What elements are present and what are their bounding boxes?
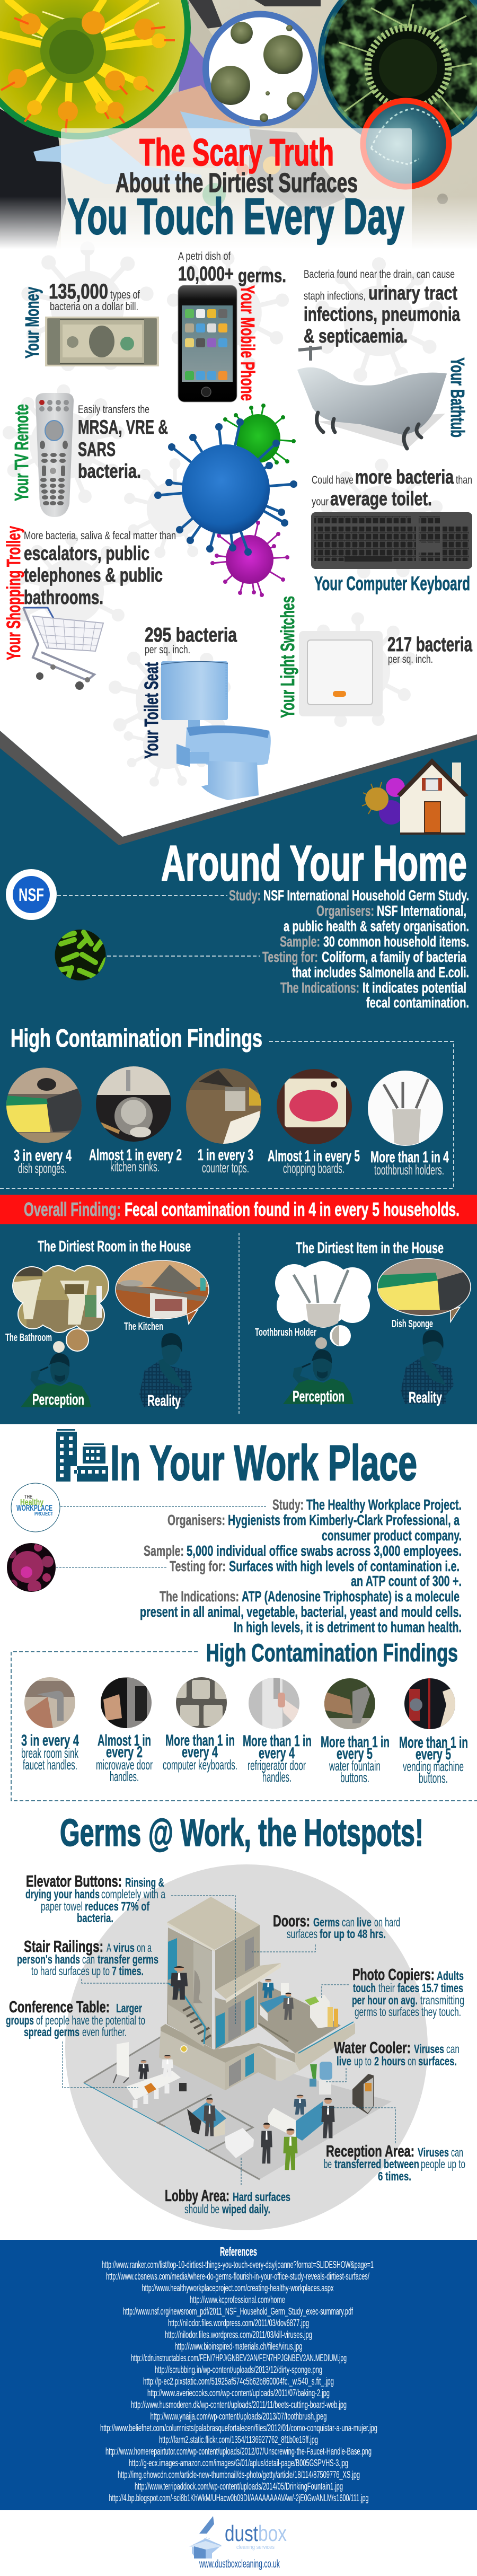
small office desk — [192, 2101, 226, 2129]
hero circle: yellow virus — [0, 0, 188, 136]
home finding labels: chopping boards. — [283, 1160, 344, 1176]
panel: your shopping trolley: More bacteria, saliva & fecal matter than — [24, 530, 176, 542]
callout: conference table: spread germs — [24, 2025, 80, 2039]
panel: your toilet seat: 295 bacteria — [145, 624, 237, 646]
mid wall and doors — [215, 1982, 257, 2051]
icon: toilet — [161, 661, 271, 800]
home finding labels: dish sponges. — [18, 1160, 67, 1176]
panel: your tv remote — [11, 393, 168, 517]
panel: your bathtub: Your Bathtub — [447, 357, 469, 437]
vending machine — [352, 2074, 374, 2114]
callout: water cooler: surfaces. — [418, 2054, 457, 2068]
callout: elevator buttons: Elevator Buttons: — [26, 1872, 122, 1890]
illustration: isometric office building — [84, 1897, 392, 2179]
panel: references: http://www.healthyworkplaceproject.com/creating-healthy-workplaces.aspx — [142, 2283, 334, 2293]
callout: elevator buttons: bacteria. — [77, 1911, 113, 1925]
photo copier — [310, 1995, 330, 2028]
office floor — [258, 1981, 341, 2053]
banner: overall finding — [0, 1195, 477, 1224]
panel: references: http://p-ec2.pixstatic.com/51925af574c5b62b860004fc._w.540_s.fit_.jpg — [143, 2376, 334, 2387]
panel: your bathtub — [297, 268, 469, 449]
icon: keyboard — [311, 512, 472, 569]
callout: elevator buttons: Rinsing & — [125, 1876, 164, 1889]
grey hotspot circle — [65, 1864, 428, 2230]
work finding labels: buttons. — [419, 1770, 448, 1786]
callout: water cooler: up to — [354, 2054, 372, 2068]
panel: the dirtiest room: Reality — [147, 1392, 181, 1409]
work finding labels: refrigerator door — [248, 1757, 306, 1773]
photo: counter top — [186, 1068, 261, 1145]
panel: your money: bacteria on a dollar bill. — [50, 301, 138, 313]
callout: stair railings — [17, 1937, 158, 1978]
title: About the Dirtiest Surfaces — [116, 168, 358, 198]
panel: your mobile phone: 10,000+ — [178, 263, 234, 285]
callout: doors: for up to 48 hrs. — [320, 1927, 386, 1941]
work finding labels: every 4 — [182, 1743, 218, 1761]
panel: your shopping trolley: telephones & public — [24, 564, 163, 586]
panel: the dirtiest item: Dish Sponge — [392, 1318, 433, 1330]
panel: your tv remote: SARS — [78, 439, 116, 460]
panel: your money: Your Money — [21, 287, 43, 358]
hero circle: teal virus — [363, 101, 449, 187]
callout: stair railings: 7 times. — [112, 1964, 144, 1978]
figure: reality person — [401, 1330, 454, 1404]
callout: stair railings: Stair Railings: — [24, 1937, 103, 1956]
photo: cells — [7, 1543, 56, 1594]
logo: healthy workplace project: Healthy — [20, 1498, 43, 1507]
panel: your toilet seat — [140, 624, 237, 759]
panel: your computer keyboard: your — [312, 496, 329, 508]
callout: doors: Doors: — [273, 1912, 310, 1930]
tower walls — [167, 1927, 212, 2048]
panel: your tv remote: Easily transfers the — [78, 404, 149, 416]
panel: your computer keyboard — [311, 466, 472, 594]
photo: microwave handle — [101, 1677, 152, 1729]
panel: your light switches: Your Light Switches — [277, 596, 298, 718]
photo: faucet handle — [24, 1677, 75, 1729]
callout: reception area: 6 times. — [378, 2169, 411, 2183]
callout: reception area: transferred between — [334, 2157, 419, 2171]
panel: the dirtiest item: Perception — [293, 1388, 344, 1405]
work finding labels: faucet handles. — [23, 1757, 77, 1773]
office desk — [260, 1993, 290, 2012]
panel: your bathtub: & septicaemia. — [304, 325, 408, 347]
callout: conference table: even further. — [82, 2025, 127, 2039]
icon: remote control — [36, 393, 74, 517]
callout: water cooler: 2 hours — [374, 2054, 405, 2068]
text block: workplace study details: Organisers: — [167, 1512, 225, 1528]
panel: your shopping trolley: bathrooms. — [24, 586, 103, 608]
callout: water cooler: Viruses — [414, 2042, 444, 2056]
bubble: kitchen speech — [116, 1260, 209, 1324]
panel: your shopping trolley — [3, 526, 176, 690]
title: The Scary Truth — [139, 132, 334, 174]
work finding labels: every 5 — [416, 1746, 451, 1763]
figure: reality person — [139, 1333, 192, 1407]
panel: the dirtiest item: Toothbrush Holder — [255, 1327, 316, 1338]
heading: high contamination findings (home): High Contamination Findings — [11, 1024, 262, 1052]
callout: photo copiers: touch — [353, 1981, 376, 1995]
logo: NSF — [6, 869, 57, 920]
panel: the dirtiest room: The Bathroom — [5, 1332, 52, 1344]
work finding labels: More than 1 in — [165, 1732, 235, 1749]
bubble: bathroom thought — [11, 1265, 111, 1353]
callout: doors — [273, 1912, 400, 1941]
callout: lobby area: Hard surfaces — [233, 2190, 290, 2204]
panel: references: http://www.husmoderen.dk/wp-content/uploads/2011/11/beets-cutting-board-web.jpg — [131, 2399, 347, 2410]
work finding labels: every 4 — [259, 1745, 295, 1762]
lower block walls — [159, 2031, 225, 2090]
work finding labels: buttons. — [340, 1769, 369, 1785]
callout: reception area: be — [324, 2157, 332, 2171]
text block: workplace study details: Testing for: — [170, 1558, 226, 1574]
panel: your shopping trolley: escalators, public — [24, 542, 149, 564]
callout: water cooler — [334, 2038, 460, 2068]
title — [67, 132, 404, 245]
figure: perception person — [21, 1353, 91, 1407]
icon: house with viruses — [362, 758, 469, 835]
panel: references: http://www.kcprofessional.com/home — [190, 2294, 285, 2305]
work finding labels: computer keyboards. — [163, 1757, 237, 1773]
work finding labels: handles. — [110, 1768, 139, 1784]
callout: water cooler: on — [408, 2054, 416, 2068]
panel: references: http://nilodor.files.wordpress.com/2011/03/kill-viruses.jpg — [165, 2329, 312, 2340]
panel: references: http://www.terripaddock.com/wp-content/uploads/2014/05/DrinkingFountain1.jpg — [135, 2481, 343, 2492]
callout: photo copiers — [352, 1965, 464, 2019]
callout: stair railings: to hard surfaces up to — [31, 1964, 110, 1978]
callout: stair railings: virus — [113, 1941, 135, 1955]
panel: references: http://scrubbing.in/wp-content/uploads/2013/12/dirty-sponge.png — [155, 2364, 322, 2375]
waiting chairs — [225, 2128, 254, 2158]
callout: water cooler: Water Cooler: — [334, 2038, 411, 2057]
callout: conference table: Conference Table: — [9, 1997, 110, 2016]
work finding labels: break room sink — [21, 1745, 79, 1761]
callout: water cooler: can — [446, 2042, 460, 2056]
reception desk — [268, 2108, 297, 2139]
icon: viruses by the house — [362, 778, 405, 825]
ledge — [161, 2024, 295, 2063]
work finding labels: More than 1 in — [321, 1733, 390, 1751]
panel: your mobile phone — [178, 250, 286, 402]
panel: your light switches: per sq. inch. — [388, 653, 433, 665]
logo: healthy workplace project: WORKPLACE — [16, 1504, 52, 1513]
section background: around your home — [0, 711, 477, 1424]
figure: perception person — [283, 1350, 354, 1404]
panel: references: http://farm2.static.flickr.com/1354/1136927762_8f1b0e15ff.jpg — [159, 2434, 318, 2446]
hero circle: white with spiky balls — [206, 14, 315, 123]
callout: doors: on hard — [374, 1915, 400, 1929]
callout: conference table — [6, 1997, 145, 2039]
logo: dustbox: cleaning services — [236, 2544, 275, 2551]
translucent title panel — [61, 128, 412, 250]
text block: household study details: The Indications: — [280, 979, 359, 996]
work finding labels: every 2 — [106, 1743, 143, 1761]
panel: your bathtub: staph infections, — [304, 290, 366, 302]
callout: elevator buttons: drying your hands — [25, 1887, 100, 1901]
panel: references — [0, 2240, 477, 2510]
panel: your mobile phone: Your Mobile Phone — [237, 285, 259, 401]
panel: your computer keyboard: than — [456, 474, 472, 486]
icon: green virus — [225, 406, 294, 463]
icon: blue virus — [158, 422, 294, 552]
callout: lobby area: Lobby Area: — [165, 2186, 229, 2205]
callout: lobby area — [165, 2186, 290, 2216]
conference area — [126, 2071, 181, 2100]
icon: bacteria photo — [55, 930, 106, 980]
callout: photo copiers: their — [378, 1981, 395, 1995]
icon: box with scoop — [189, 2516, 222, 2559]
photo: vending machine — [404, 1678, 457, 1729]
callout: elevator buttons — [25, 1872, 165, 1925]
text block: household study details: Sample: — [280, 933, 320, 950]
panel: references: References — [220, 2245, 257, 2258]
panel: your mobile phone: A petri dish of — [178, 250, 231, 262]
logo: healthy workplace project: PROJECT — [34, 1511, 53, 1517]
panel: references: http://www.ynaija.com/wp-content/uploads/2013/07/toothbrush.jpeg — [151, 2411, 326, 2422]
photo: water fountain — [324, 1678, 375, 1731]
panel: your money: 135,000 — [49, 280, 108, 303]
ground floor plate — [84, 2037, 392, 2179]
panel: references: http://www.bioinspired-materials.ch/files/virus.jpg — [175, 2341, 302, 2352]
panel: the dirtiest room: The Dirtiest Room in the House — [38, 1238, 191, 1255]
water cooler and plant — [310, 2064, 317, 2079]
divider: perception panels — [238, 1233, 240, 1415]
callout: photo copiers: Photo Copiers: — [352, 1965, 435, 1984]
work finding labels: 3 in every 4 — [21, 1732, 79, 1749]
logo: healthy workplace project — [11, 1483, 60, 1532]
panel: your money — [21, 280, 159, 366]
callout: doors: surfaces — [287, 1927, 317, 1941]
home finding labels: counter tops. — [202, 1160, 249, 1176]
photo: dish sponge — [5, 1067, 85, 1144]
panel: references: http://nilodor.files.wordpress.com/2011/03/dov6877.jpg — [168, 2318, 309, 2328]
icon: dollar bill — [45, 317, 159, 366]
bubble: sponge speech — [377, 1258, 471, 1322]
dashed frame: work findings — [11, 1652, 477, 1801]
callout: water cooler: live — [337, 2054, 351, 2068]
panel: your toilet seat: Your Toilet Seat — [140, 662, 162, 759]
callout: lobby area: wiped daily. — [222, 2202, 270, 2216]
logo: dustbox: www.dustboxcleaning.co.uk — [199, 2558, 280, 2570]
icon: bathtub — [297, 346, 447, 449]
text block: workplace study details: Sample: — [144, 1543, 184, 1559]
panel: the dirtiest item — [255, 1240, 471, 1406]
callout: conference table: of people have the potential to — [36, 2013, 145, 2027]
callout: stair railings: person's hands — [17, 1952, 80, 1966]
work finding labels: water fountain — [329, 1758, 381, 1774]
callout: doors: live — [357, 1915, 372, 1929]
callout: reception area — [324, 2142, 465, 2183]
callout: doors: can — [342, 1915, 355, 1929]
hero photo background — [0, 0, 477, 249]
work finding labels: microwave door — [96, 1757, 153, 1773]
dashed frame: home findings — [0, 1041, 454, 1188]
home finding labels — [14, 1146, 449, 1178]
logo: dustbox: dust — [225, 2521, 258, 2546]
icon: magenta virus — [213, 523, 287, 595]
work finding labels: handles. — [262, 1769, 292, 1785]
callout: stair railings: can — [82, 1952, 95, 1966]
callout: elevator buttons: completely with a — [101, 1887, 165, 1901]
text block: workplace study details — [140, 1496, 462, 1635]
panel: your computer keyboard: average toilet. — [330, 488, 432, 510]
home finding labels: Almost 1 in every 2 — [89, 1146, 182, 1164]
text block: household study details: Organisers: — [316, 903, 374, 919]
photo: kitchen sink — [95, 1066, 172, 1142]
panel: the dirtiest room: Perception — [32, 1391, 84, 1408]
text block: household study details: Study: — [229, 887, 261, 904]
panel: references: http://www.averiecooks.com/wp-content/uploads/2011/07/baking-2.jpg — [147, 2388, 330, 2398]
icon: smartphone — [178, 285, 237, 402]
panel: the dirtiest item: Reality — [409, 1389, 442, 1406]
icon: central virus cluster — [158, 406, 294, 595]
connector lines: workplace study — [56, 1507, 266, 1567]
panel: your tv remote: Your TV Remote — [11, 404, 32, 501]
work finding labels: More than 1 in — [243, 1732, 312, 1750]
home finding labels: 1 in every 3 — [198, 1146, 253, 1164]
callout: lobby area: should be — [184, 2202, 219, 2216]
photo: keyboard keys — [176, 1677, 227, 1728]
photo: toothbrush holder — [368, 1071, 443, 1146]
work finding labels: Almost 1 in — [98, 1732, 151, 1749]
callout: photo copiers: per hour on avg. — [352, 1993, 418, 2007]
work finding labels — [21, 1732, 468, 1786]
text block: workplace study details: Study: — [272, 1496, 304, 1513]
icon: shopping trolley — [23, 608, 103, 690]
logo: NSF: NSF — [19, 885, 44, 905]
text block: household study details — [229, 887, 469, 1011]
work finding labels: every 5 — [337, 1745, 373, 1763]
callout: reception area: Reception Area: — [326, 2142, 414, 2160]
leader lines — [63, 1896, 395, 2186]
panel: the dirtiest room — [5, 1238, 209, 1409]
bubble: toothbrush thought — [275, 1261, 371, 1349]
photo: chopping board — [277, 1069, 352, 1144]
icon: light switch — [299, 631, 383, 716]
icon: office buildings — [56, 1429, 108, 1482]
panel: your light switches — [277, 596, 473, 718]
text block: workplace study details: The Indications: — [160, 1588, 239, 1605]
callout: reception area: can — [451, 2145, 463, 2159]
panel: your toilet seat: per sq. inch. — [145, 644, 190, 656]
text block: household study details: Testing for: — [262, 949, 318, 965]
logo: dustbox — [189, 2516, 287, 2570]
callout: elevator buttons: paper towel — [41, 1899, 83, 1913]
callout: conference table: groups — [6, 2013, 34, 2027]
panel: your tv remote: bacteria. — [78, 460, 141, 482]
callout: stair railings: A — [107, 1941, 111, 1955]
panel: your shopping trolley: Your Shopping Trolley — [3, 526, 24, 660]
callout: reception area: Viruses — [418, 2145, 449, 2159]
panel: your mobile phone: germs. — [238, 265, 286, 286]
background virus silhouettes — [3, 242, 443, 786]
callout: conference table: Larger — [116, 2001, 142, 2015]
panel: the dirtiest room: The Kitchen — [124, 1321, 163, 1333]
panel: your tv remote: MRSA, VRE & — [78, 416, 168, 438]
callout: stair railings: transfer germs — [98, 1952, 158, 1966]
home finding labels: kitchen sinks. — [110, 1159, 160, 1175]
panel: your computer keyboard: Could have — [312, 474, 354, 486]
callout: photo copiers: Adults — [437, 1969, 464, 1983]
banner: overall finding: Overall Finding: — [24, 1198, 121, 1220]
callout: elevator buttons: reduces 77% of — [85, 1899, 149, 1913]
photo: refrigerator handle — [249, 1678, 299, 1729]
callout: doors: Germs — [313, 1915, 340, 1929]
callout: stair railings: on a — [137, 1941, 152, 1955]
logo: healthy workplace project: THE — [24, 1494, 32, 1500]
connector lines: study details — [57, 896, 260, 956]
home finding labels: Almost 1 in every 5 — [268, 1147, 360, 1165]
logo: dustbox: box — [258, 2521, 287, 2546]
hero circle: dark green virus — [318, 0, 477, 148]
panel: your money: types of — [110, 288, 140, 301]
home finding labels: 3 in every 4 — [14, 1147, 72, 1164]
